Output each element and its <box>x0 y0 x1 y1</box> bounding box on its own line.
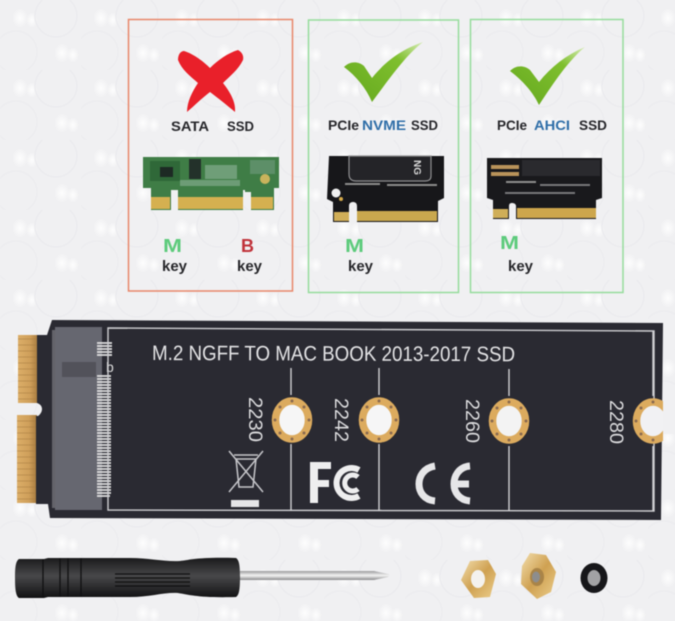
brass standoff <box>521 553 556 599</box>
M.2 socket: b <box>106 359 114 375</box>
M key label: M <box>163 236 182 256</box>
length labels: 2230 <box>244 397 265 442</box>
label: PCIe NVME SSD <box>328 118 438 133</box>
panel: SATA SSD <box>128 20 292 291</box>
label: SATA SSD <box>171 119 254 134</box>
adapter board <box>17 320 675 520</box>
NVME SSD module: NG <box>411 160 422 175</box>
label: PCIe AHCI SSD <box>497 118 607 133</box>
length labels <box>244 397 626 444</box>
screwdriver <box>15 558 390 598</box>
silkscreen frame <box>108 328 654 511</box>
black PCB <box>36 320 663 520</box>
M.2 socket <box>52 327 114 510</box>
gold edge connector <box>17 335 38 503</box>
M key label <box>162 236 188 275</box>
label: PCIe AHCI SSD: PCIe <box>497 118 527 133</box>
SATA SSD module <box>143 157 279 210</box>
open notch at board edge <box>663 408 675 434</box>
FCC logo <box>310 462 359 503</box>
M key label <box>345 236 374 275</box>
black washer <box>580 563 608 593</box>
label: SATA SSD: SSD <box>227 119 254 134</box>
label: PCIe AHCI SSD: AHCI <box>534 118 570 133</box>
icon: red cross <box>178 50 243 112</box>
icon: crossed-out bin <box>229 451 263 507</box>
panel: PCIe NVME SSD <box>308 20 458 292</box>
length labels: 2242 <box>330 398 351 442</box>
shaft <box>240 571 390 580</box>
NVME SSD module <box>327 156 444 222</box>
M key label: M <box>500 233 519 253</box>
label: SATA SSD: SATA <box>171 119 209 134</box>
label: PCIe AHCI SSD: SSD <box>579 118 607 133</box>
mounting holes <box>274 400 670 442</box>
M key label: M <box>345 236 364 256</box>
label: PCIe NVME SSD: SSD <box>411 118 438 133</box>
AHCI SSD module <box>487 158 602 219</box>
M key label: key <box>508 258 534 275</box>
B key label: B <box>241 236 254 256</box>
icon: green check <box>344 42 423 102</box>
length labels: 2280 <box>605 400 626 444</box>
M key label <box>500 233 534 275</box>
M key label: key <box>348 258 374 275</box>
label: PCIe NVME SSD: NVME <box>362 118 406 133</box>
handle ribs <box>43 558 190 598</box>
silkscreen title: M.2 NGFF TO MAC BOOK 2013-2017 SSD <box>152 342 515 366</box>
B key label: key <box>237 258 263 275</box>
length labels: 2260 <box>461 399 482 443</box>
M key label: key <box>162 258 188 275</box>
icon: green check <box>510 47 585 105</box>
brass nut <box>461 560 496 598</box>
panel: PCIe AHCI SSD <box>470 20 623 292</box>
label: PCIe NVME SSD: PCIe <box>328 118 360 133</box>
B key label <box>237 236 263 275</box>
handle <box>15 558 240 598</box>
CE logo <box>419 466 470 501</box>
